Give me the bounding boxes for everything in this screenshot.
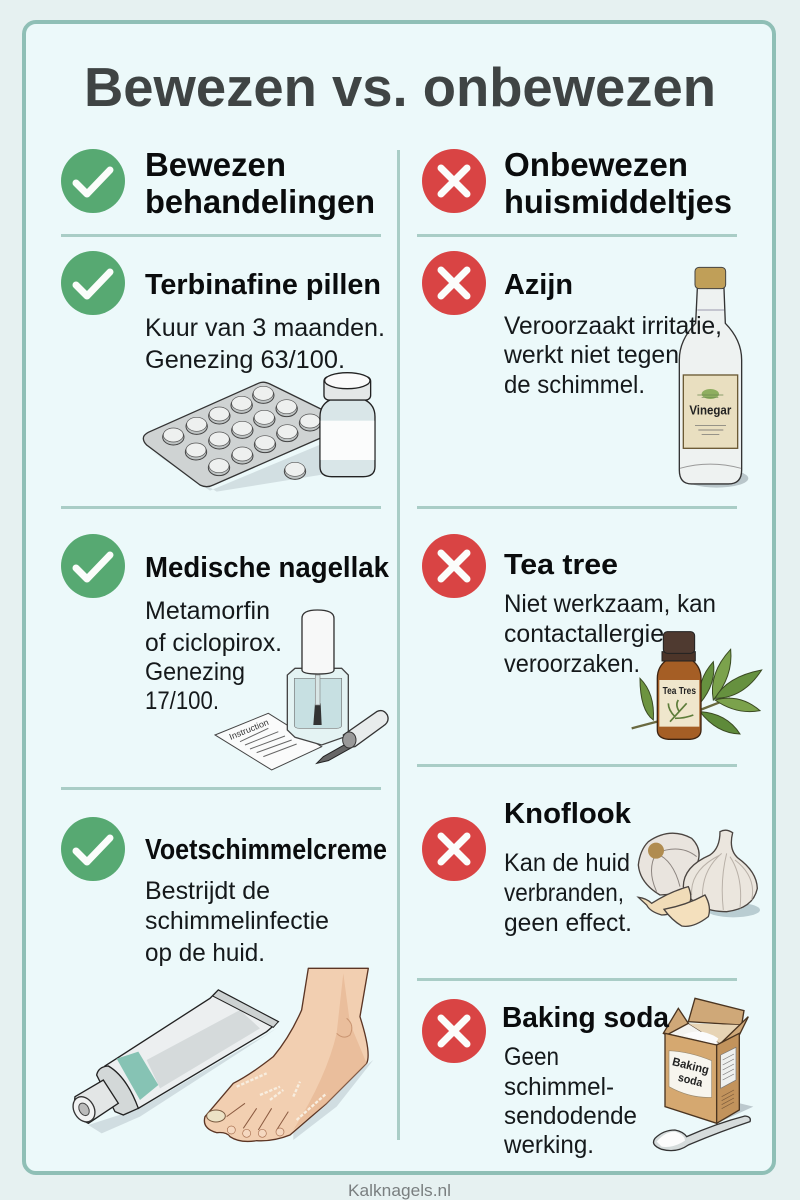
illustration: baking soda box and spoon: soda [677,1072,704,1090]
illustration: tea tree oil and leaves: Tea Tres [663,686,696,697]
title: Medische nagellak: Medische nagellak [145,552,390,584]
item: Terbinafine pillen [61,251,385,492]
icon: check [61,817,125,881]
panel: unproven remedies column [422,146,762,1159]
title: Tea tree: Tea tree [504,549,618,581]
heading: Onbewezen huismiddeltjes: huismiddeltjes [504,183,732,220]
text: Baking soda description: Geen [504,1043,559,1071]
text: Baking soda description: schimmel- [504,1073,614,1101]
item: Azijn [422,251,748,488]
title: Azijn: Azijn [504,269,573,301]
text: Baking soda description: sendodende [504,1102,637,1130]
illustration: vinegar bottle [679,267,748,488]
footer: source: Kalknagels.nl [348,1181,451,1200]
icon: cross [422,251,486,315]
heading: Onbewezen huismiddeltjes: Onbewezen [504,146,688,183]
text: Azijn description: de schimmel. [504,371,645,399]
title: Knoflook: Knoflook [504,798,632,830]
column header: unproven [422,146,732,220]
illustration: baking soda box and spoon [653,998,753,1151]
text: creme description: op de huid. [145,939,265,967]
illustration: tea tree oil and leaves [632,632,762,739]
icon: cross [422,817,486,881]
icon: cross [422,534,486,598]
text: Azijn description: werkt niet tegen [503,341,679,369]
illustration: vinegar bottle: Vinegar [689,403,731,417]
text: creme description: Bestrijdt de [145,877,270,905]
column header: proven [61,146,375,220]
illustration: baking soda box and spoon: Baking [671,1055,710,1077]
text: Terbinafine description: Genezing 63/100. [145,346,345,374]
item: Tea tree [422,534,762,739]
item: Voetschimmelcreme [61,817,387,1141]
text: nagellak description: of ciclopirox. [145,629,282,657]
text: nagellak description: Genezing [145,658,245,686]
text: Baking soda description: werking. [503,1131,594,1159]
text: Knoflook description: verbranden, [504,879,624,907]
illustration: nail polish and instructions: Instruction [228,717,270,742]
heading: Bewezen behandelingen: behandelingen [145,183,375,220]
icon: check [61,251,125,315]
panel: proven treatments column [61,146,390,1141]
text: Azijn description: Veroorzaakt irritatie, [504,312,722,340]
text: creme description: schimmelinfectie [145,907,329,935]
text: Terbinafine description: Kuur van 3 maanden. [145,314,385,342]
text: Knoflook description: geen effect. [504,909,632,937]
text: Tea tree description: Niet werkzaam, kan [504,590,716,618]
icon: check [61,534,125,598]
title: Voetschimmelcreme: Voetschimmelcreme [145,834,387,866]
icon: check [61,149,125,213]
illustration: blister pack and pill bottle [143,373,375,492]
icon: cross [422,149,486,213]
text: Knoflook description: Kan de huid [504,849,630,877]
text: nagellak description: Metamorfin [145,597,270,625]
text: nagellak description: 17/100. [145,687,219,715]
illustration: garlic [638,830,760,926]
illustration: nail polish and instructions [215,610,388,770]
icon: cross [422,999,486,1063]
title: Bewezen vs. onbewezen [84,57,716,118]
text: Tea tree description: veroorzaken. [504,650,640,678]
illustration: cream tube and foot [69,968,373,1141]
heading: Bewezen behandelingen: Bewezen [145,146,286,183]
item: Medische nagellak [61,534,390,770]
title: Baking soda: Baking soda [502,1002,670,1034]
title: Terbinafine pillen: Terbinafine pillen [145,269,381,301]
item: Baking soda [422,998,753,1159]
item: Knoflook [422,798,760,937]
text: Tea tree description: contactallergie [504,620,664,648]
